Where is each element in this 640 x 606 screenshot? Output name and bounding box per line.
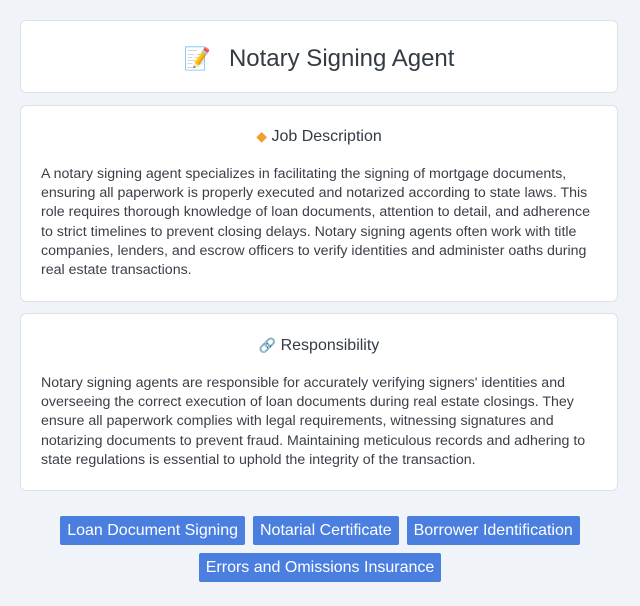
text: responsibility: Notary signing agents are responsible for accurately verifying signers' identities and overseeing the correct execution of loan documents during real estate closings. They ensure all paperwork complies with legal requirements, witnessing signatures and notarizing documents to prevent fraud. Maintaining meticulous records and adhering to state regulations is essential to uphold the integrity of the transaction. <box>41 375 585 468</box>
title: 📝 Notary Signing Agent <box>184 45 454 72</box>
tag <box>199 553 441 582</box>
text: job description: A notary signing agent specializes in facilitating the signing of mortgage documents, ensuring all paperwork is properly executed and notarized according to state laws. This role requires thorough knowledge of loan documents, attention to detail, and adherence to strict timelines to prevent closing delays. Notary signing agents often work with title companies, lenders, and escrow officers to verify identities and administer oaths during real estate transactions. <box>41 166 590 278</box>
heading: responsibility: 🔗 Responsibility <box>259 337 379 354</box>
tag <box>60 516 245 545</box>
tag: Loan Document Signing <box>67 522 238 539</box>
heading: job description: ◆ Job Description <box>256 128 382 145</box>
tag <box>407 516 580 545</box>
tag: Errors and Omissions Insurance <box>206 559 434 576</box>
tag: Borrower Identification <box>414 522 573 539</box>
header card <box>20 20 618 93</box>
tags <box>60 516 580 582</box>
panel: job description <box>20 105 618 302</box>
panel: responsibility <box>20 313 618 491</box>
tag <box>253 516 399 545</box>
tag: Notarial Certificate <box>260 522 392 539</box>
